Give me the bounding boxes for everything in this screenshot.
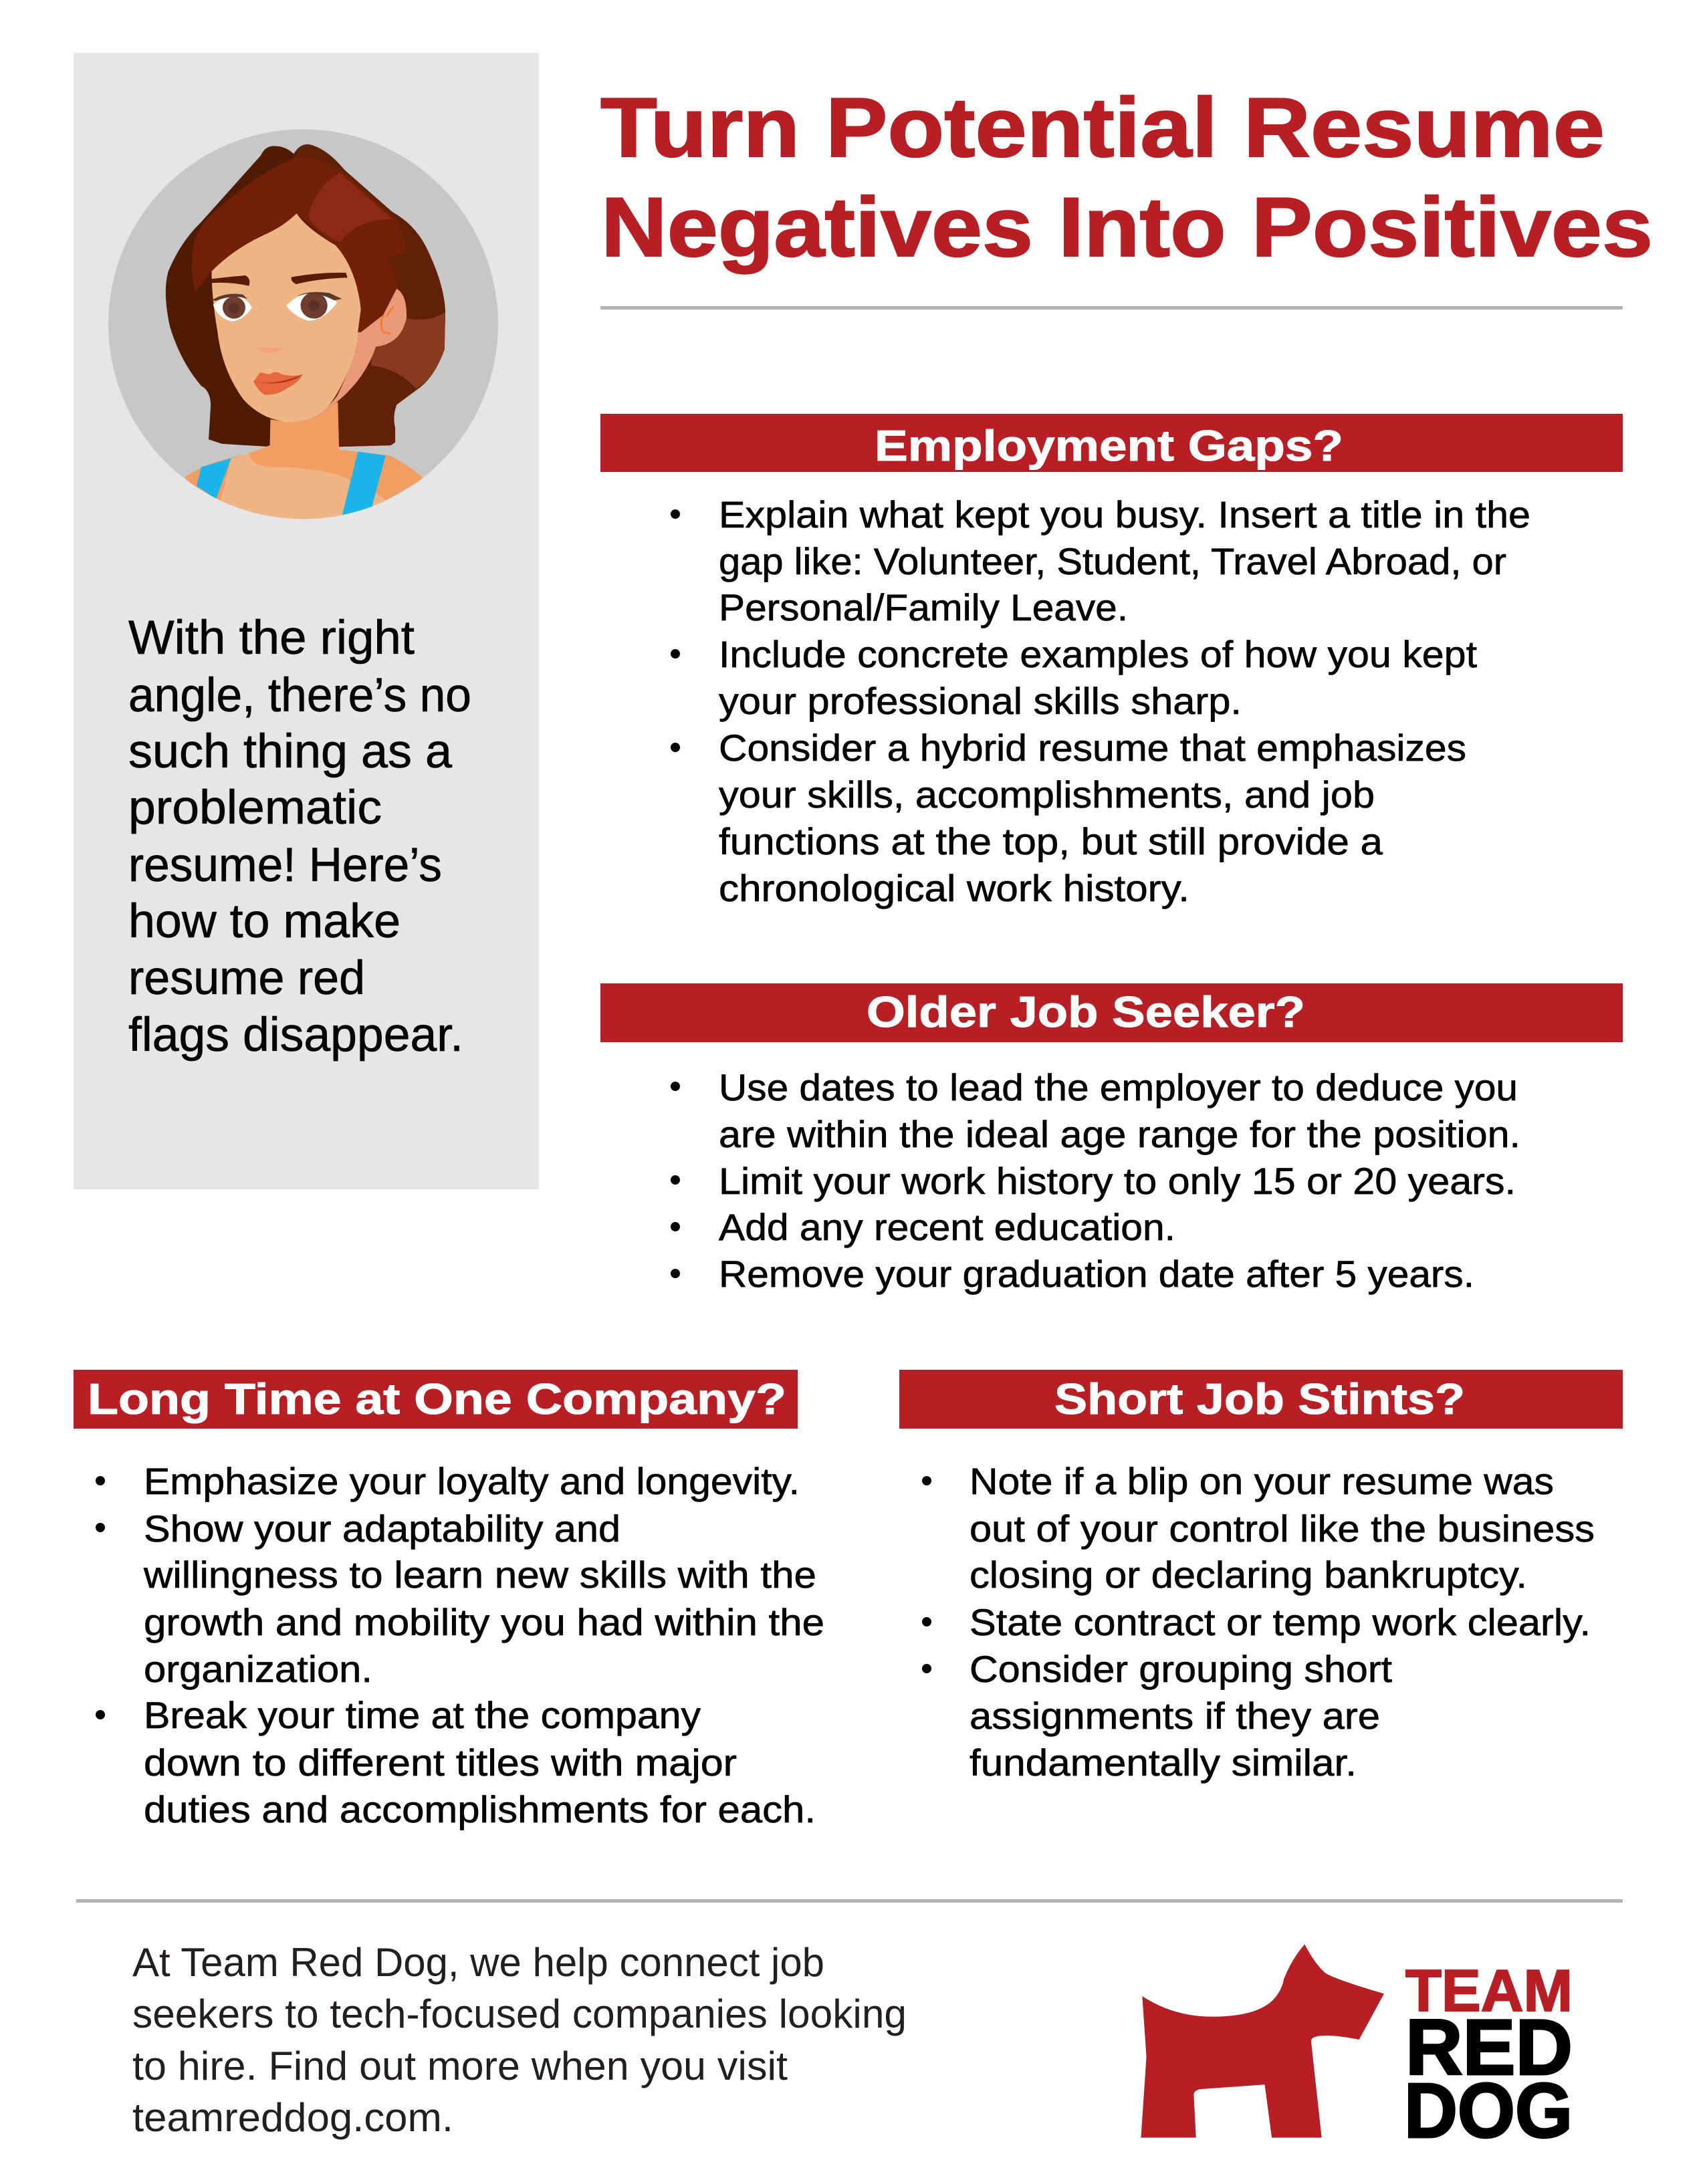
bullet list: long time at one company: growth and mobility you had within the: [144, 1601, 824, 1643]
heading bar: short job stints: [899, 1370, 1623, 1429]
heading bar: long time at one company: [74, 1370, 798, 1429]
footer text: teamreddog.com.: [132, 2095, 453, 2140]
bullet list: employment gaps: [671, 493, 1530, 909]
logo wordmark: TEAM: [1405, 1957, 1573, 2024]
heading bar: older job seeker: Older Job Seeker?: [867, 987, 1305, 1036]
intro text: resume red: [128, 952, 365, 1005]
bullet list: long time at one company: willingness to learn new skills with the: [143, 1554, 816, 1596]
panel: employment gaps: [600, 414, 1623, 909]
panel: short job stints: [899, 1370, 1623, 1784]
bullet list: older job seeker: are within the ideal age range for the position.: [719, 1113, 1520, 1155]
bullet list: older job seeker: Add any recent education.: [719, 1206, 1175, 1248]
bullet list: short job stints: [922, 1460, 1595, 1784]
intro text: angle, there’s no: [128, 669, 471, 722]
title: [600, 80, 1653, 274]
bullet list: older job seeker: Remove your graduation date after 5 years.: [719, 1253, 1474, 1295]
bullet list: short job stints: assignments if they are: [970, 1695, 1380, 1737]
heading bar: short job stints: Short Job Stints?: [1054, 1374, 1465, 1423]
bullet list: short job stints: Note if a blip on your resume was: [970, 1460, 1554, 1502]
bullet list: short job stints: out of your control like the business: [970, 1507, 1595, 1550]
bullet list: short job stints: Consider grouping short: [970, 1648, 1392, 1690]
logo wordmark: [1404, 1957, 1573, 2154]
bullet list: long time at one company: organization.: [144, 1648, 372, 1690]
intro text: [128, 612, 471, 1062]
bullet list: long time at one company: Show your adaptability and: [144, 1507, 620, 1550]
bullet list: long time at one company: [96, 1460, 824, 1830]
logo wordmark: RED: [1405, 2004, 1573, 2092]
intro text: problematic: [128, 781, 382, 834]
portrait illustration: [108, 129, 498, 519]
title: Negatives Into Positives: [601, 180, 1653, 274]
heading bar: older job seeker: [600, 983, 1623, 1042]
bullet list: employment gaps: Explain what kept you busy. Insert a title in the: [719, 493, 1530, 535]
bullet list: employment gaps: Include concrete examples of how you kept: [719, 633, 1477, 675]
bullet list: long time at one company: duties and accomplishments for each.: [144, 1788, 816, 1830]
bullet list: employment gaps: functions at the top, but still provide a: [719, 820, 1383, 862]
bullet list: employment gaps: your skills, accomplishments, and job: [719, 773, 1375, 816]
heading bar: long time at one company: Long Time at One Company?: [88, 1374, 786, 1423]
bullet list: long time at one company: Emphasize your loyalty and longevity.: [144, 1460, 800, 1502]
logo wordmark: DOG: [1404, 2067, 1573, 2154]
icon: red dog: [1141, 1944, 1384, 2138]
bullet list: employment gaps: chronological work history.: [719, 867, 1189, 909]
bullet list: employment gaps: gap like: Volunteer, Student, Travel Abroad, or: [719, 540, 1506, 582]
intro text: flags disappear.: [128, 1009, 463, 1062]
intro text: With the right: [128, 612, 415, 664]
intro text: resume! Here’s: [128, 839, 442, 892]
panel: long time at one company: [74, 1370, 824, 1830]
bullet list: short job stints: closing or declaring bankruptcy.: [970, 1554, 1527, 1596]
panel: intro sidebar: [74, 53, 539, 1189]
footer text: At Team Red Dog, we help connect job: [132, 1940, 824, 1985]
intro text: such thing as a: [128, 725, 453, 778]
footer text: [132, 1940, 907, 2140]
bullet list: long time at one company: down to different titles with major: [144, 1741, 737, 1784]
bullet list: employment gaps: Personal/Family Leave.: [719, 586, 1128, 628]
panel: older job seeker: [600, 983, 1623, 1295]
bullet list: older job seeker: Limit your work history to only 15 or 20 years.: [719, 1160, 1516, 1202]
bullet list: short job stints: State contract or temp work clearly.: [970, 1601, 1591, 1643]
bullet list: short job stints: fundamentally similar.: [970, 1741, 1357, 1784]
bullet list: older job seeker: Use dates to lead the employer to deduce you: [719, 1066, 1518, 1108]
footer text: seekers to tech-focused companies looking: [132, 1991, 907, 2036]
intro text: how to make: [128, 895, 401, 948]
bullet list: older job seeker: [671, 1066, 1520, 1295]
bullet list: long time at one company: Break your time at the company: [144, 1694, 701, 1736]
logo: Team Red Dog: [1141, 1944, 1573, 2154]
bullet list: employment gaps: your professional skills sharp.: [719, 680, 1242, 722]
footer text: to hire. Find out more when you visit: [132, 2044, 788, 2088]
bullet list: employment gaps: Consider a hybrid resume that emphasizes: [719, 727, 1466, 769]
heading bar: employment gaps: Employment Gaps?: [875, 421, 1343, 470]
heading bar: employment gaps: [600, 414, 1623, 472]
title: Turn Potential Resume: [600, 80, 1605, 174]
